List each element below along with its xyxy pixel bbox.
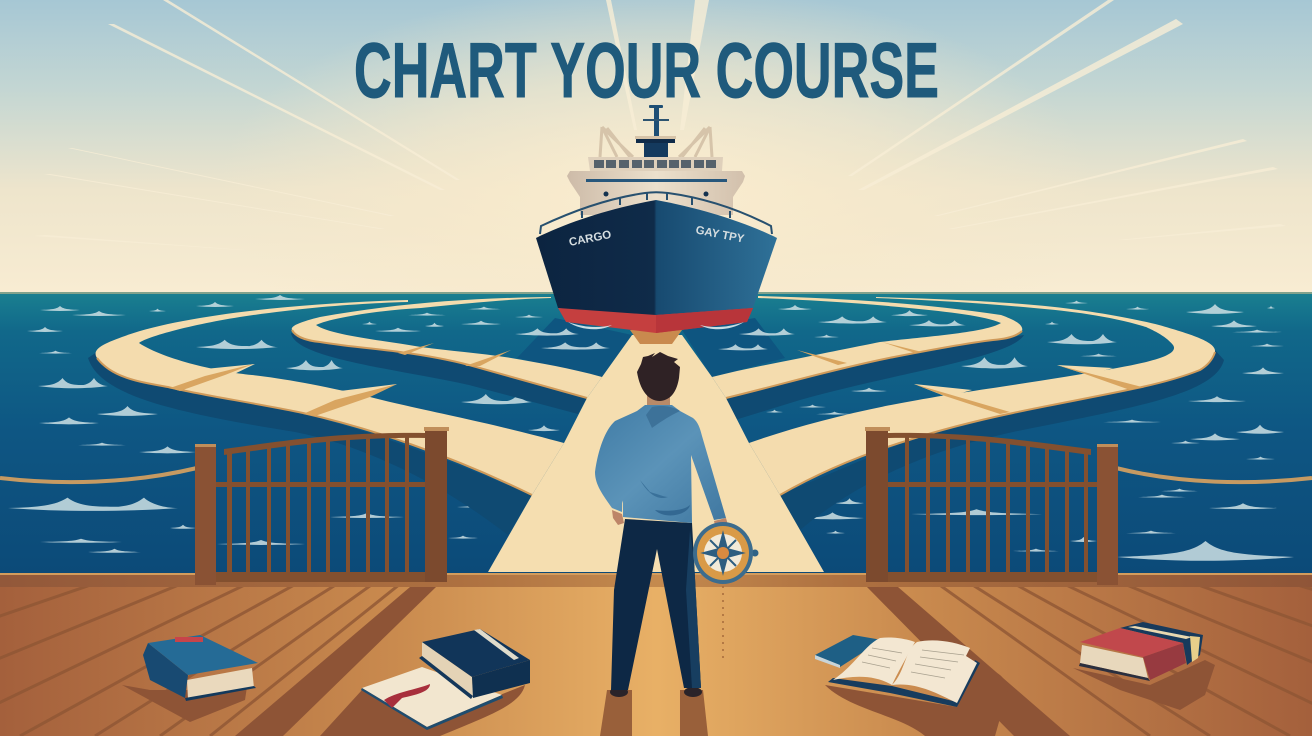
lower left branch (96, 300, 564, 495)
branching paths (88, 296, 1224, 572)
central path (488, 335, 824, 572)
superstructure (567, 157, 745, 215)
upper left branch (292, 297, 602, 398)
right gate (865, 427, 1118, 585)
shirt with arms (595, 405, 726, 523)
shoes (610, 687, 702, 697)
hands (612, 510, 728, 525)
sky background (0, 0, 1312, 293)
deck rail band (0, 573, 1312, 587)
cargo ship (536, 105, 777, 344)
hull name left: CARGO (568, 229, 612, 249)
deck (0, 587, 1312, 736)
trousers (611, 519, 701, 690)
trouser highlight (686, 530, 701, 688)
path tip under keel (630, 330, 682, 344)
left rope (0, 468, 197, 482)
plank spurs (170, 342, 1142, 416)
dotted trail (722, 586, 724, 662)
compass (693, 522, 758, 584)
waves (8, 295, 1294, 561)
mast and funnel (635, 105, 676, 158)
title: CHART YOUR COURSE (354, 26, 939, 114)
upper right branch (712, 296, 1022, 398)
red waterline (558, 308, 753, 333)
path shadows (88, 333, 1224, 535)
plank lines (0, 587, 1312, 736)
cranes (600, 127, 712, 157)
bow railing (540, 192, 772, 234)
book: red with band (1073, 622, 1215, 710)
sea (0, 292, 1312, 575)
sun rays (35, 0, 1286, 250)
book: teal behind open book (815, 635, 882, 668)
person seen from behind (595, 352, 758, 697)
hull (536, 200, 777, 320)
left gate (195, 427, 449, 585)
right rope (1116, 468, 1312, 482)
neck and head (637, 352, 680, 410)
open book (825, 637, 1008, 736)
hull name right: GAY TPY (695, 224, 745, 246)
lower right branch (749, 297, 1215, 495)
book: navy over open notebook (320, 629, 530, 736)
dark water wedges by the ship (515, 318, 795, 377)
book: blue with bookmark (122, 635, 258, 722)
hair (637, 352, 680, 401)
